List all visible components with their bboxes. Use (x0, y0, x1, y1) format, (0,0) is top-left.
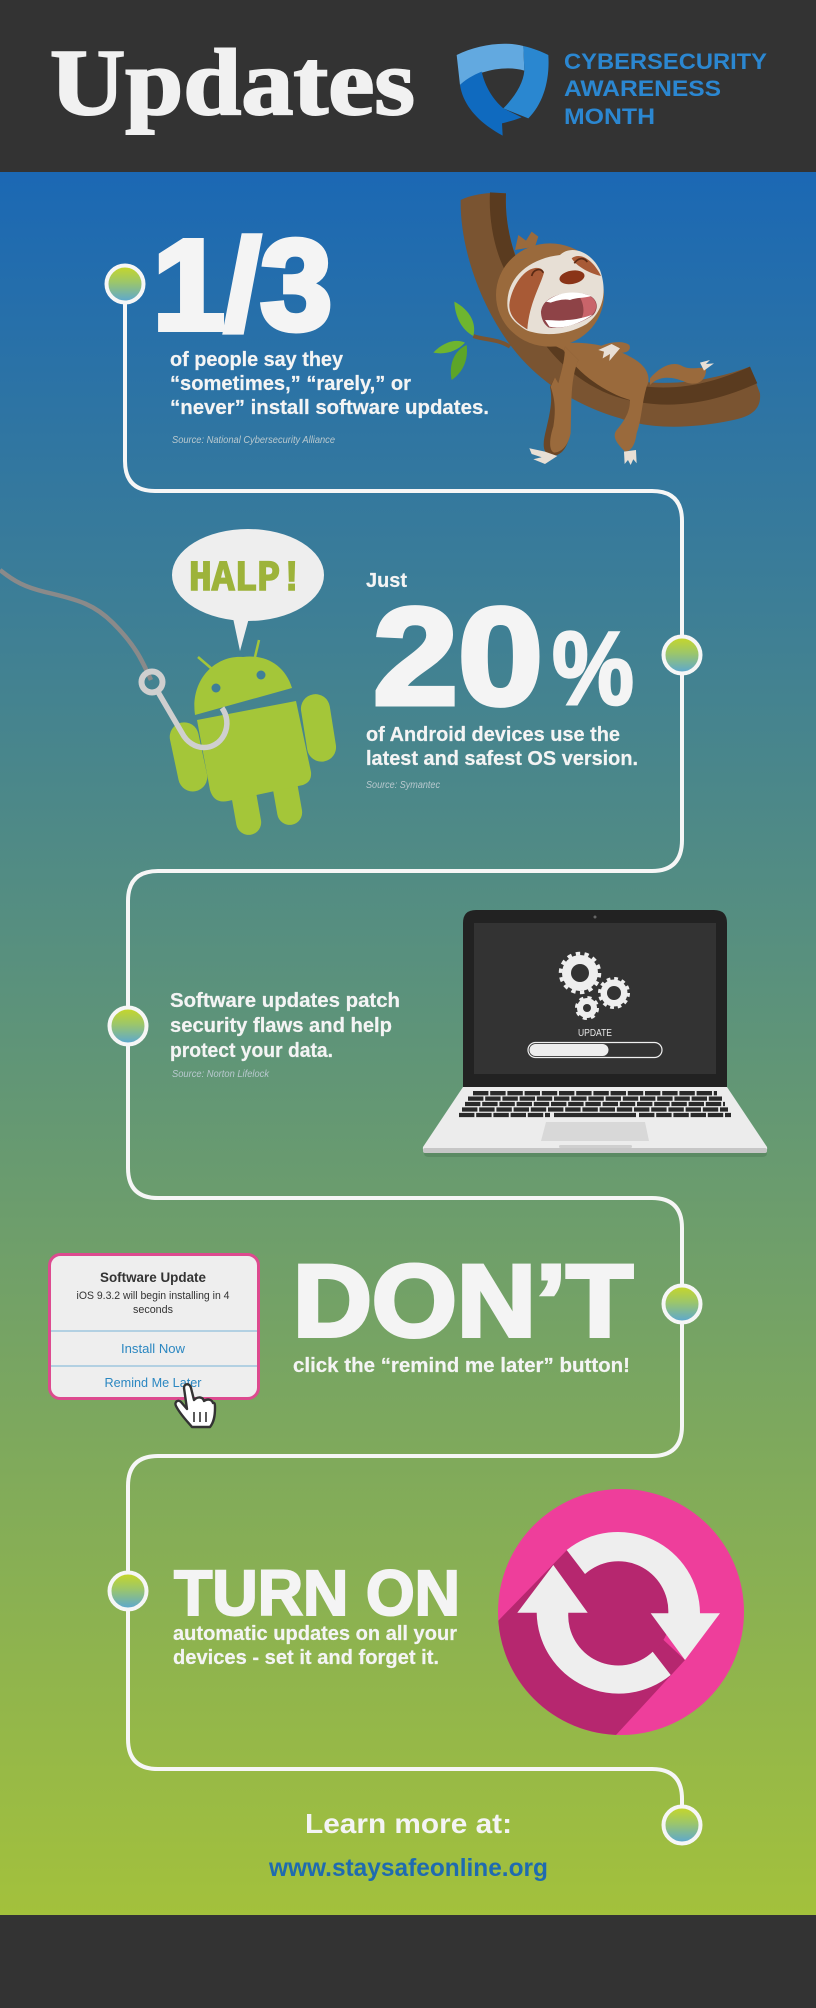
big number 20%: % (552, 611, 634, 727)
source: Source: Symantec (366, 780, 440, 791)
subheading: devices - set it and forget it. (173, 1647, 439, 1669)
footer band (0, 1915, 816, 2008)
panel: software updates text: protect your data. (170, 1040, 333, 1062)
statistic text: “sometimes,” “rarely,” or (170, 373, 411, 395)
icon: laptop (423, 910, 767, 1157)
timeline path (125, 284, 682, 1825)
title: Updates (50, 31, 415, 135)
panel: one third statistic (153, 214, 489, 446)
panel: software updates text (170, 990, 400, 1080)
statistic text: of people say they (170, 349, 344, 371)
header band (0, 0, 816, 172)
icon: refresh arrows (498, 1489, 744, 1735)
logo wordmark (564, 49, 767, 129)
statistic text: latest and safest OS version. (366, 748, 638, 770)
statistic text (170, 349, 489, 419)
panel: update dialog: Install Now (121, 1341, 186, 1356)
keyboard (459, 1093, 731, 1115)
progress bar (528, 1042, 662, 1058)
panel: software updates text: Software updates patch (170, 990, 400, 1012)
source: Source: Norton Lifelock (172, 1069, 270, 1080)
call to action (268, 1808, 548, 1882)
statistic text: “never” install software updates. (170, 397, 489, 419)
panel: update dialog: seconds (133, 1304, 173, 1316)
panel: update dialog: Remind Me Later (104, 1375, 202, 1390)
icon: fishing line and hook (0, 570, 338, 837)
panel: update dialog: iOS 9.3.2 will begin installing in 4 (76, 1290, 230, 1302)
statistic text: of Android devices use the (366, 724, 620, 746)
big number 1/3: 1/3 (153, 214, 332, 357)
speech bubble: HALP: HALP! (189, 554, 303, 603)
logo wordmark: AWARENESS (564, 76, 721, 101)
call to action: Learn more at: (305, 1808, 512, 1839)
source: Source: National Cybersecurity Alliance (172, 435, 335, 446)
gears (560, 954, 628, 1019)
speech bubble: HALP (172, 529, 324, 651)
logo wordmark: CYBERSECURITY (564, 49, 767, 74)
statistic text (366, 724, 638, 770)
panel: turn on heading: TURN ON (174, 1557, 460, 1629)
subheading: click the “remind me later” button! (293, 1355, 630, 1377)
panel: twenty percent statistic (366, 570, 638, 791)
subheading: automatic updates on all your (173, 1623, 457, 1645)
subheading (173, 1623, 457, 1669)
panel: software updates text: security flaws and help (170, 1015, 392, 1037)
panel: don't heading: DON’T (293, 1244, 633, 1358)
icon: sloth on branch (433, 192, 760, 465)
panel: update dialog (50, 1254, 258, 1398)
panel: update dialog: Software Update (100, 1269, 206, 1285)
android robot (167, 640, 338, 837)
icon: pointing hand cursor (175, 1384, 215, 1427)
big number 20%: 20 (373, 580, 543, 734)
logo: shield (457, 44, 549, 136)
timeline dots (106, 266, 700, 1844)
big number 20% (373, 580, 634, 734)
lead-in: Just (366, 570, 407, 592)
logo wordmark: MONTH (564, 104, 655, 129)
panel: turn on heading (173, 1557, 460, 1669)
update label: UPDATE (578, 1027, 612, 1039)
website link: www.staysafeonline.org (268, 1854, 548, 1882)
